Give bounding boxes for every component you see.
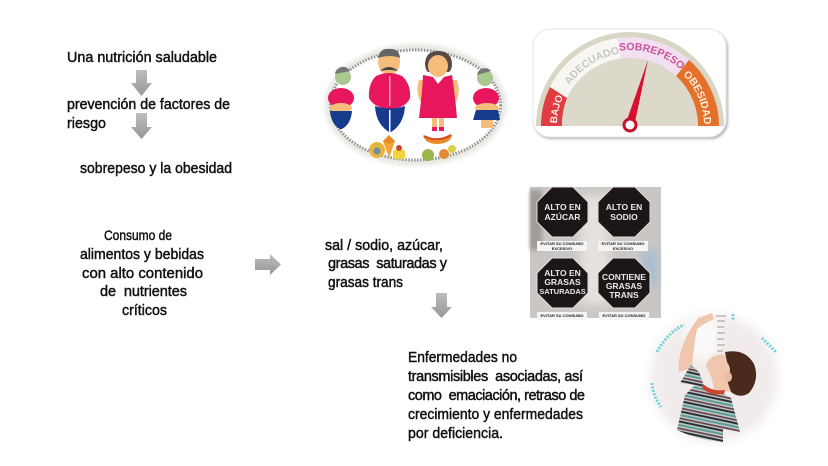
octagon: sodio: SODIO <box>610 212 638 222</box>
text: Consumo de alimentos <box>80 227 204 319</box>
caption: evitar 1: EXCESIVO <box>552 246 572 251</box>
gauge dial <box>536 32 724 126</box>
text: Enfermedades no transmisibles: Enfermedades no <box>408 350 517 366</box>
image: warning labels <box>530 187 661 320</box>
text: Enfermedades no transmisibles: crecimiento y enfermedades <box>408 407 583 423</box>
caption: evitar 1: EVITAR SU CONSUMO <box>540 241 584 246</box>
gauge labels: ADECUADO <box>566 47 618 85</box>
text: prevención de factores de riesgo <box>67 97 230 132</box>
boy shirt <box>677 365 740 442</box>
octagon: grasas saturadas: GRASAS <box>544 277 581 287</box>
image: boy measuring height <box>650 311 778 442</box>
boy arm <box>679 313 714 372</box>
gauge labels: BAJO <box>550 95 562 123</box>
boy hair <box>725 351 756 396</box>
label background <box>530 187 661 318</box>
octagon: azúcar: ALTO EN <box>544 202 581 212</box>
octagon: sodio <box>598 187 650 237</box>
icon: hot dog <box>423 134 452 144</box>
figure: left child <box>328 67 354 129</box>
text: Enfermedades no transmisibles: como emaciación, retraso de <box>408 388 585 404</box>
image: weight gauge <box>532 28 730 140</box>
text: nutrientes críticos list <box>325 238 448 291</box>
text: nutrientes críticos list: sal / sodio, azúcar, <box>325 238 443 254</box>
photo circle <box>650 311 778 442</box>
ruler <box>716 316 726 351</box>
octagon: azúcar <box>537 187 588 237</box>
gauge needle <box>624 60 648 131</box>
octagon: azúcar: AZÚCAR <box>545 211 580 222</box>
text: Consumo de alimentos: alimentos y bebidas <box>80 247 204 263</box>
arrow: down 3 <box>431 293 452 318</box>
caption: evitar 1 <box>537 241 587 251</box>
text: Enfermedades no transmisibles <box>408 350 585 442</box>
cyan frame flecks <box>652 314 776 407</box>
text: Consumo de alimentos: Consumo de <box>104 227 172 243</box>
text: Consumo de alimentos: con alto contenido <box>82 266 203 282</box>
icon: food row <box>369 135 456 161</box>
text: Enfermedades no transmisibles: por deficiencia. <box>408 426 503 442</box>
gauge card <box>533 29 728 139</box>
text: nutrientes críticos list: grasas trans <box>328 275 403 291</box>
text: nutrientes críticos list: grasas saturadas y <box>328 256 448 272</box>
text: Consumo de alimentos: de nutrientes <box>100 284 187 300</box>
octagon: grasas trans <box>598 258 650 308</box>
octagon: grasas saturadas: ALTO EN <box>544 268 581 278</box>
gauge labels: OBESIDAD <box>684 71 712 124</box>
oval frame <box>328 48 502 162</box>
octagon: grasas trans: CONTIENE <box>602 272 646 282</box>
boy collar <box>702 384 725 394</box>
arrow: down 2 <box>131 113 152 139</box>
arrow: right <box>255 254 281 275</box>
gauge labels <box>550 42 712 124</box>
text: prevención de factores de riesgo: riesgo <box>67 116 106 132</box>
text: prevención de factores de riesgo: prevención de factores de <box>67 97 230 113</box>
caption: evitar 2: EVITAR SU CONSUMO <box>601 241 645 246</box>
caption: evitar 4: EVITAR SU CONSUMO <box>602 313 646 318</box>
caption: evitar 2: EXCESIVO <box>613 246 633 251</box>
figure: father <box>369 49 410 132</box>
caption: evitar 3: EVITAR SU CONSUMO <box>540 313 584 318</box>
text: Consumo de alimentos: críticos <box>122 303 167 319</box>
arrow: down 1 <box>131 70 152 96</box>
gauge labels: SOBREPESO <box>620 42 684 68</box>
octagon: grasas trans: GRASAS <box>606 281 643 291</box>
octagon: grasas saturadas <box>537 258 588 308</box>
octagon: grasas saturadas: SATURADAS <box>539 287 586 296</box>
octagon: grasas trans: TRANS <box>609 290 639 300</box>
image: family with overweight <box>328 48 502 162</box>
figure: mother <box>417 51 459 131</box>
caption: evitar 2 <box>598 241 648 251</box>
text: sobrepeso y la obesidad: sobrepeso y la obesidad <box>80 161 232 177</box>
boy neck and face <box>706 354 736 392</box>
text: Una nutrición saludable: Una nutrición saludable <box>67 50 217 66</box>
octagon: sodio: ALTO EN <box>606 202 642 212</box>
boy ear <box>724 372 732 382</box>
figure: right child <box>473 68 500 128</box>
text: Enfermedades no transmisibles: transmisibles asociadas, así <box>408 369 583 385</box>
